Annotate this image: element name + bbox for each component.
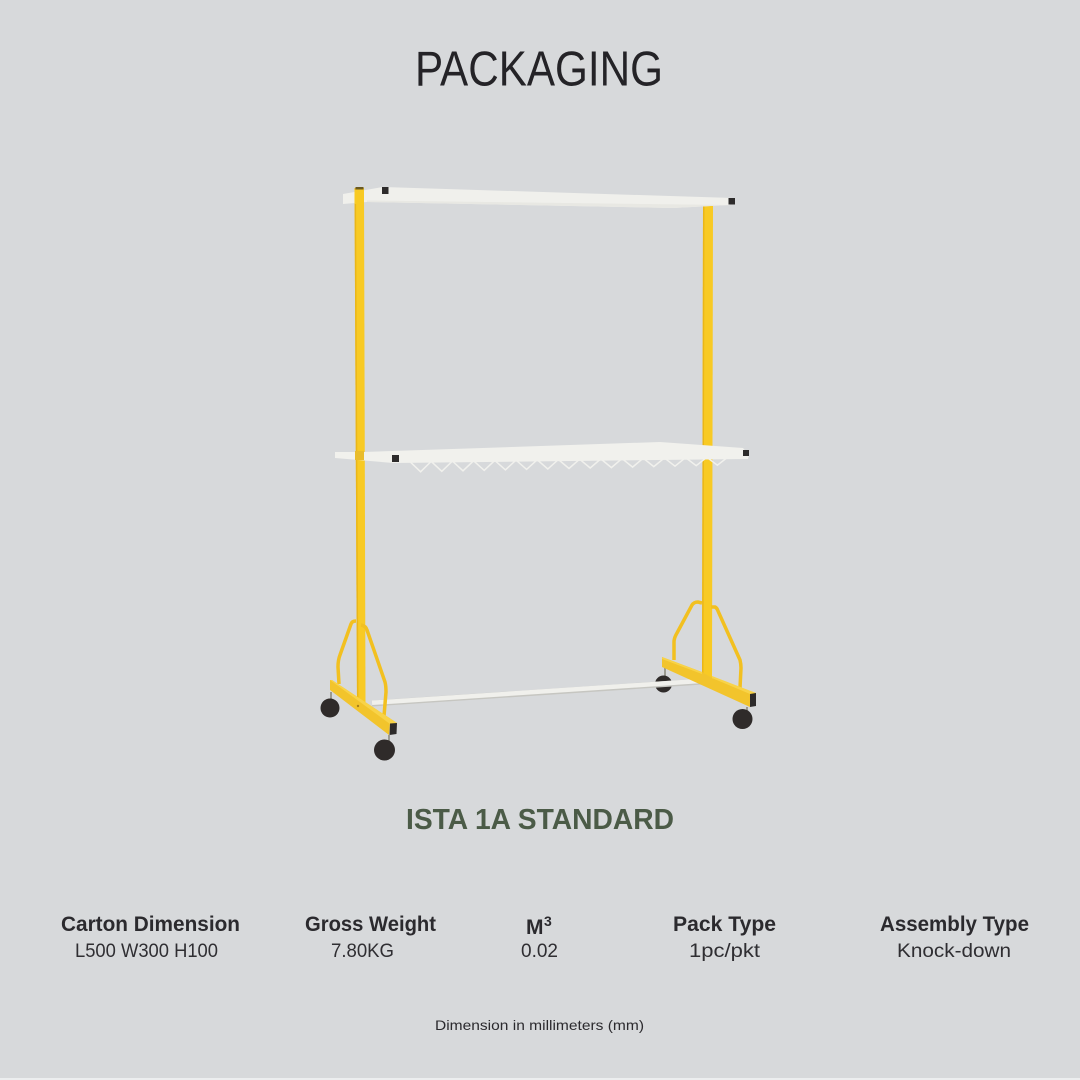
spec: gross weight: 7.80KG: [331, 941, 394, 962]
spec: assembly type: Assembly Type: [880, 913, 1029, 936]
top shelf: [343, 187, 735, 208]
spec: cubic metres: M: [526, 916, 544, 939]
zigzag wire hanger: [410, 457, 728, 472]
right upright post: [702, 206, 713, 680]
spec: carton dimension: Carton Dimension: [61, 913, 240, 936]
spec: cubic metres: [521, 913, 558, 962]
middle shelf: [335, 442, 749, 472]
title: PACKAGING: [415, 42, 663, 96]
front caster wheels: [374, 707, 752, 760]
spec: gross weight: Gross Weight: [305, 913, 436, 936]
back caster wheels: [320, 668, 672, 718]
spec: pack type: [673, 913, 776, 962]
spec: assembly type: Knock-down: [897, 941, 1011, 962]
left upright post: [354, 188, 366, 703]
spec: carton dimension: [61, 913, 240, 962]
spec: assembly type: [880, 913, 1029, 962]
spec: pack type: Pack Type: [673, 913, 776, 936]
right foot with hoops: [662, 602, 756, 707]
footnote: Dimension in millimeters (mm): [435, 1017, 644, 1033]
product name: ISTA 1A STANDARD: [406, 804, 674, 836]
spec: carton dimension: L500 W300 H100: [75, 941, 218, 962]
spec: gross weight: [305, 913, 436, 962]
product illustration: clothes rack: [320, 187, 756, 760]
lower rail: [372, 681, 703, 704]
left foot with hoops: [330, 621, 397, 735]
spec: cubic metres: 0.02: [521, 941, 558, 962]
spec: cubic metres: 3: [544, 913, 552, 929]
spec: pack type: 1pc/pkt: [689, 941, 761, 962]
